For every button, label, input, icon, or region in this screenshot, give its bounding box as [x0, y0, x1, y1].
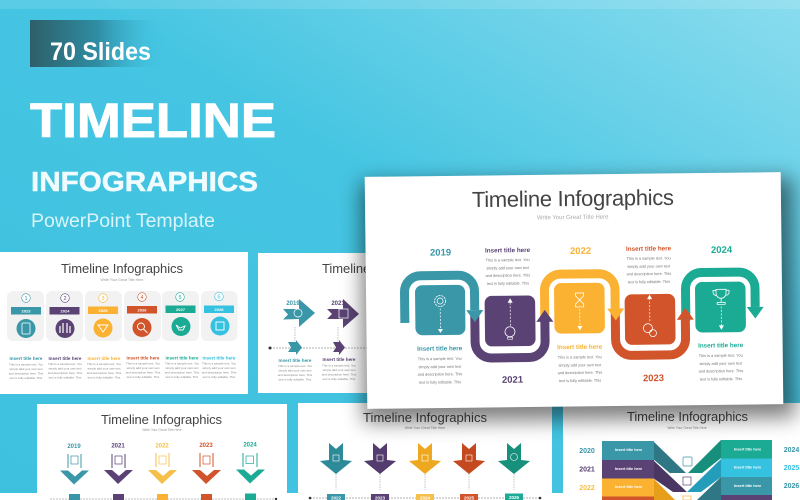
text column 5: and description here. This: [165, 370, 200, 374]
arrow 2024: [409, 443, 441, 500]
text block 2019: [417, 345, 463, 385]
text column 1: [9, 356, 44, 380]
text column 4: Insert title here: [127, 356, 160, 360]
panel: slide with chevrons: [37, 404, 287, 500]
chevron 2024: 2024: [243, 442, 257, 448]
text column 2019: text is fully editable. This: [279, 378, 312, 382]
step 2023: box with coins icon: [625, 294, 676, 345]
left years: [579, 448, 595, 492]
arrow 2026: [498, 443, 530, 500]
text block 2021: This is a sample text. You: [486, 257, 530, 263]
chevron 2021: [104, 444, 133, 484]
year 2022: 2022: [570, 246, 591, 257]
card 6: 2028: [215, 307, 224, 312]
text block 2022: Insert title here: [557, 344, 603, 351]
slide heading: Timeline Infographics: [61, 261, 184, 276]
text column 2021: and description here. This: [322, 372, 357, 376]
card 4: [124, 291, 161, 341]
chevron 2022: 2022: [155, 444, 169, 450]
card 1: 2023: [22, 308, 31, 314]
shadow of main slide: [361, 178, 795, 422]
right years: 2024: [784, 447, 799, 454]
text column 2021: Insert title here: [323, 357, 356, 362]
text column 4: This is a sample text. You: [126, 362, 160, 366]
chevron 2023: 2023: [199, 443, 213, 449]
slide heading: Timeline Infographics: [322, 261, 444, 276]
title: TIMELINE: TIMELINE: [30, 95, 276, 148]
right ribbon bars: Insert title here: [734, 466, 761, 470]
text column 4: simply add your own text: [126, 366, 160, 370]
text block 2022: This is a sample text. You: [558, 354, 602, 360]
text column 3: and description here. This: [87, 371, 122, 375]
text column 6: text is fully editable. This: [203, 375, 236, 379]
text column 1: simply add your own text: [9, 367, 43, 371]
text block 2019: This is a sample text. You: [418, 356, 462, 361]
arrow marker 2019: 2019: [286, 301, 300, 307]
text column 2021: simply add your own text: [322, 368, 356, 372]
arrow 2022: [320, 443, 352, 500]
chevron 2019: 2019: [67, 444, 81, 450]
left years: 2020: [579, 448, 595, 455]
text column 5: text is fully editable. This: [166, 375, 199, 379]
slide subheading: Write Your Great Title Here: [405, 426, 445, 430]
text column 5: Insert title here: [166, 356, 199, 360]
text block 2019: and description here. This: [418, 371, 462, 377]
main heading: Timeline Infographics: [472, 185, 674, 212]
card 6: [201, 291, 238, 341]
text column 6: and description here. This: [202, 370, 237, 374]
timeline dots: [309, 497, 541, 499]
text column 6: Insert title here: [203, 356, 236, 360]
step 2023: arrow: [615, 308, 694, 356]
text block 2022: [557, 344, 603, 383]
panel: slide with arrow timeline: [258, 253, 444, 393]
text column 5: simply add your own text: [165, 366, 199, 370]
arrow 2023: [364, 443, 396, 500]
text column 2: This is a sample text. You: [48, 362, 82, 366]
text column 2019: simply add your own text: [278, 368, 312, 372]
text block 2024: This is a sample text. You: [699, 353, 743, 358]
chevron 2021: 2021: [111, 444, 125, 450]
text column 2019: and description here. This: [278, 373, 313, 377]
card 3: [85, 291, 122, 341]
text column 3: Insert title here: [88, 356, 121, 361]
text column 2021: [322, 357, 357, 381]
step 2022: arrow: [544, 273, 624, 322]
right years: 2025: [784, 465, 799, 472]
chevron 2024: [236, 442, 265, 484]
arrow marker 2021: [327, 299, 359, 355]
card 2: [46, 291, 83, 341]
text block 2023: and description here. This: [626, 271, 671, 276]
text column 1: This is a sample text. You: [9, 362, 43, 366]
text block 2019: text is fully editable. This: [419, 379, 461, 385]
arrow marker 2019: [283, 299, 315, 355]
text block 2023: [626, 245, 672, 284]
text block 2021: and description here. This: [485, 272, 530, 278]
chevron 2023: [192, 443, 221, 484]
text column 2: [48, 356, 83, 380]
left ribbon bars: Insert title here: [615, 448, 642, 452]
card 1: [7, 291, 44, 341]
slide heading: Timeline Infographics: [363, 410, 488, 425]
text block 2021: Insert title here: [485, 247, 531, 255]
card 5: 2027: [176, 307, 186, 312]
arrow 2026: 2026: [509, 495, 520, 500]
chevron 2019: [60, 444, 89, 484]
text column 1: text is fully editable. This: [10, 376, 43, 380]
text block 2022: text is fully editable. This: [559, 378, 601, 383]
left years: 2022: [579, 485, 595, 492]
ribbon folds: [653, 440, 721, 500]
year 2021: 2021: [502, 375, 524, 386]
slide heading: Timeline Infographics: [627, 409, 748, 424]
title: INFOGRAPHICS: INFOGRAPHICS: [31, 166, 258, 197]
card 2: 2024: [61, 308, 70, 314]
text column 2: Insert title here: [49, 356, 82, 361]
text block 2024: text is fully editable. This: [700, 376, 742, 382]
timeline line with numbered squares: [50, 494, 277, 500]
text block 2022: simply add your own text: [558, 362, 602, 368]
card 5: [162, 291, 199, 341]
text column 6: simply add your own text: [202, 366, 236, 370]
panel: main timeline slide: [365, 172, 783, 409]
card 4: 4: [140, 295, 144, 301]
panel: slide with downward arrows: [298, 403, 552, 500]
text block 2023: simply add your own text: [627, 263, 671, 269]
right ribbon bars: Insert title here: [734, 448, 761, 452]
slide subheading: Write Your Great Title Here: [142, 428, 182, 432]
main subheading: Write Your Great Title Here: [537, 215, 609, 221]
timeline line: [310, 497, 540, 499]
timeline start dot: [268, 346, 272, 350]
panel: slide with folded ribbons: [563, 403, 800, 500]
step 2024: arrow: [685, 272, 764, 321]
card 3: 3: [101, 296, 105, 302]
text column 5: [165, 356, 200, 379]
year 2023: 2023: [643, 373, 664, 384]
slide subheading: Write Your Great Title Here: [101, 278, 143, 282]
badge: 70 Slides: [30, 20, 165, 67]
card 3: 2025: [99, 308, 108, 313]
left ribbon bars: Insert title here: [615, 485, 642, 489]
card 1: 1: [24, 296, 28, 302]
left ribbon bars: [602, 441, 654, 500]
text block 2021: simply add your own text: [486, 265, 530, 270]
card 2: 2: [63, 296, 67, 302]
white triangles with icons: [670, 457, 704, 500]
text column 1: and description here. This: [9, 372, 44, 376]
timeline line: [270, 347, 375, 349]
text block 2022: and description here. This: [558, 370, 602, 375]
right ribbon bars: Insert title here: [734, 484, 761, 488]
decorative light band at top: [0, 0, 800, 9]
text column 5: This is a sample text. You: [165, 362, 199, 366]
right ribbon bars: [721, 440, 772, 500]
text column 1: Insert title here: [10, 356, 43, 361]
text block 2023: text is fully editable. This: [628, 279, 670, 284]
arrow marker 2021: 2021: [331, 301, 345, 307]
right years: [784, 447, 799, 490]
text column 2021: This is a sample text. You: [322, 364, 356, 368]
text column 4: and description here. This: [126, 370, 161, 374]
left years: 2021: [579, 466, 595, 474]
text block 2024: [698, 342, 744, 382]
text column 2019: [278, 358, 313, 382]
text block 2019: simply add your own text: [418, 364, 462, 369]
badge: 70 Slides: 70 Slides: [50, 38, 151, 66]
slide heading: Timeline Infographics: [101, 412, 222, 427]
text column 3: simply add your own text: [87, 366, 121, 370]
step 2024: box with trophy icon: [695, 282, 746, 333]
text block 2023: Insert title here: [626, 245, 672, 253]
card 5: 5: [178, 295, 182, 301]
arrow 2025: [453, 443, 485, 500]
text column 4: [126, 356, 161, 379]
text column 3: This is a sample text. You: [87, 362, 121, 366]
text column 6: [202, 356, 237, 379]
text block 2019: Insert title here: [417, 345, 463, 353]
text block 2024: and description here. This: [699, 368, 743, 374]
text column 2019: This is a sample text. You: [278, 364, 312, 368]
text block 2023: This is a sample text. You: [627, 255, 671, 261]
text column 2: and description here. This: [48, 371, 83, 375]
text column 3: text is fully editable. This: [88, 376, 121, 380]
step 2022: box with hourglass icon: [554, 283, 605, 334]
text column 3: [87, 356, 122, 380]
step 2021: box with bulb icon: [485, 295, 536, 347]
text column 2: simply add your own text: [48, 366, 82, 370]
step 2019: box with gear icon: [415, 285, 466, 335]
left ribbon bars: Insert title here: [615, 467, 642, 471]
slide subheading: Write Your Great Title Here: [667, 426, 707, 430]
chevron 2022: [148, 444, 177, 484]
text block 2024: Insert title here: [698, 342, 744, 350]
card 4: 2026: [138, 308, 147, 312]
text column 4: text is fully editable. This: [127, 375, 160, 379]
year 2024: 2024: [711, 245, 733, 256]
panel: slide with six numbered cards: [0, 252, 248, 394]
year 2019: 2019: [430, 247, 451, 259]
text block 2024: simply add your own text: [699, 361, 743, 366]
text column 2: text is fully editable. This: [49, 376, 82, 380]
text column 2021: text is fully editable. This: [323, 377, 356, 381]
text column 2019: Insert title here: [279, 358, 312, 363]
card 6: 6: [217, 294, 221, 300]
text block 2021: text is fully editable. This: [487, 281, 529, 286]
right years: 2026: [784, 483, 799, 490]
text block 2021: [485, 247, 531, 286]
step 2019: arrow: [404, 275, 483, 323]
step 2021: arrow: [475, 310, 554, 358]
subtitle: PowerPoint Template: PowerPoint Template: [31, 211, 215, 232]
text column 6: This is a sample text. You: [202, 362, 236, 366]
